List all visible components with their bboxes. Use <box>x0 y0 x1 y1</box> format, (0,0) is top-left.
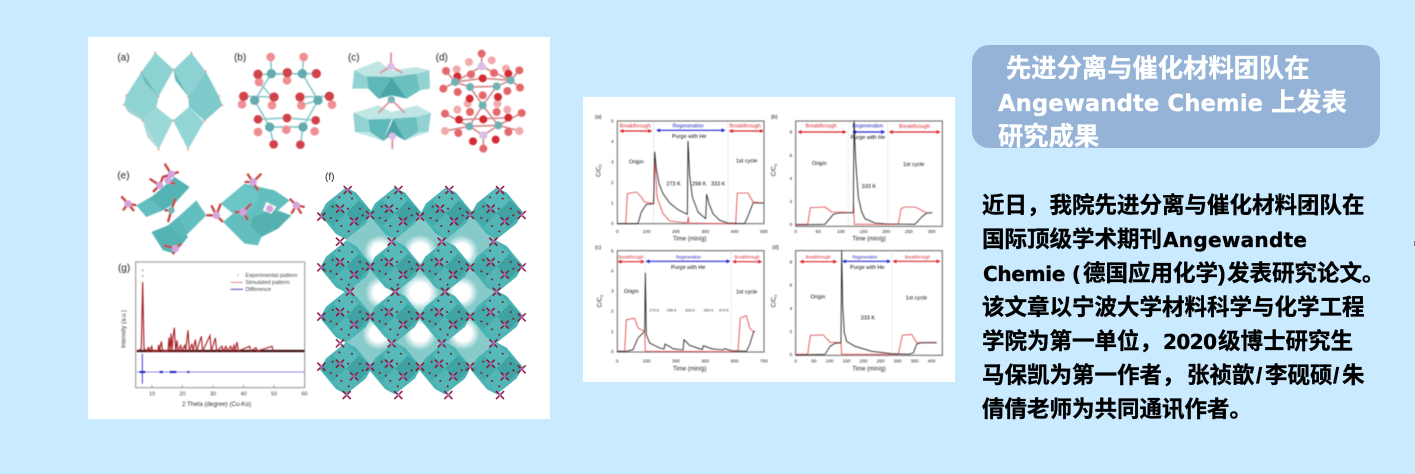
text block: news summary: 发表研究论文。 <box>1227 261 1385 286</box>
chart: breakthrough (a): 3 <box>611 160 614 165</box>
chart: breakthrough (c): 150 <box>643 359 651 364</box>
legend: Experimental pattern <box>245 273 298 279</box>
text block: news summary: 2020 <box>1163 330 1217 354</box>
chart: framework structure (f) <box>317 186 526 399</box>
label: (d): (d) <box>436 52 448 63</box>
structure panels (c) (d) <box>348 50 526 153</box>
chart: XRD pattern (g): 20 <box>179 392 185 398</box>
text block: news summary: / <box>1256 363 1263 388</box>
text block: news summary: 国际顶级学术期刊 <box>982 227 1162 252</box>
chart: breakthrough (d): Regeneration <box>852 254 878 259</box>
chart: breakthrough (c): 2 <box>611 309 614 314</box>
text block: news summary: / <box>1333 363 1340 388</box>
chart: breakthrough (c): 0 <box>611 349 614 354</box>
chart: breakthrough (b): Regeneration <box>852 124 883 130</box>
structure panels (a) (b) (e) <box>117 52 336 254</box>
chart: breakthrough (a): 300 <box>701 229 710 234</box>
chart: breakthrough (a): Origin <box>629 160 644 166</box>
label: (f): (f) <box>325 172 334 183</box>
chart: breakthrough (b): 250 <box>905 229 913 234</box>
chart: breakthrough (b): 150 <box>860 229 868 234</box>
icon: polyhedra sandwich (c) <box>352 53 431 149</box>
chart: breakthrough (b): C/C <box>772 166 778 176</box>
chart: breakthrough (a): Breakthrough <box>620 123 651 129</box>
title banner: 研究成果 <box>998 123 1099 151</box>
chart: breakthrough (c): 450 <box>701 359 710 364</box>
chart: breakthrough (b): 0 <box>790 222 793 227</box>
chart: breakthrough (a): 4 <box>611 139 614 144</box>
legend <box>231 273 298 293</box>
chart: breakthrough (c): 0 <box>616 359 619 364</box>
text block: news summary: ) <box>1218 261 1226 286</box>
chart: breakthrough (d): 8 <box>790 260 793 265</box>
chart: breakthrough (a): 298 K <box>692 181 707 187</box>
chart: breakthrough (b): 8 <box>790 130 793 135</box>
chart: XRD pattern (g): 10 <box>149 392 155 398</box>
chart: breakthrough (d): 0 <box>794 359 797 364</box>
icon: polyhedra ring (a) <box>123 52 223 150</box>
chart: breakthrough (c): Breakthrough <box>735 254 760 259</box>
chart: breakthrough (c): 300 <box>672 359 680 364</box>
text block: news summary: 朱 <box>1342 363 1365 388</box>
chart: breakthrough (a): Time (min/g) <box>673 237 706 243</box>
label: (b): (b) <box>234 52 246 63</box>
chart: breakthrough (a): 0 <box>611 221 614 226</box>
chart: breakthrough (d): 350 <box>911 359 919 364</box>
label: (c): (c) <box>348 52 360 63</box>
chart: breakthrough (d): 0 <box>773 294 778 297</box>
chart: breakthrough (c): 333 K <box>685 308 695 312</box>
title banner: 上发表 <box>1271 89 1347 117</box>
chart: breakthrough (b) <box>771 115 942 243</box>
chart: breakthrough (c) <box>595 245 768 373</box>
chart: breakthrough (b): 200 <box>882 229 891 234</box>
text block: news summary: 级博士研究生 <box>1218 329 1353 354</box>
title banner <box>972 45 1380 151</box>
label: (e): (e) <box>117 170 130 181</box>
chart: breakthrough (d): 250 <box>877 359 885 364</box>
chart: XRD pattern (g): Intensity (a.u.) <box>121 310 127 348</box>
chart: breakthrough (d): Breakthrough <box>806 254 831 259</box>
chart: XRD pattern (g): 50 <box>271 392 277 398</box>
chart: breakthrough (d): Purge with He <box>850 265 884 271</box>
text block: news summary: 张祯歆 <box>1187 363 1255 388</box>
icon: ball and stick (b) <box>238 53 336 149</box>
chart: XRD pattern (g): 60 <box>301 392 307 398</box>
chart: XRD pattern (g): 40 <box>241 392 247 398</box>
panel: crystal structure figure <box>88 37 550 419</box>
chart: breakthrough (d): C/C <box>772 297 778 307</box>
icon: polyhedra chains (e) <box>121 164 305 254</box>
chart: breakthrough (a): 0 <box>616 229 619 234</box>
chart: breakthrough (d): 50 <box>811 359 817 364</box>
chart: XRD pattern (g): 2 Theta (degree) (Cu-Kα) <box>182 401 251 408</box>
chart: breakthrough (c): Origin <box>624 289 639 295</box>
chart: breakthrough (d): 1st cycle <box>906 296 927 302</box>
chart: breakthrough (b): Purge with He <box>851 135 885 141</box>
chart: breakthrough (b): 333 K <box>862 184 876 190</box>
title banner: Angewandte Chemie <box>998 91 1263 117</box>
chart: breakthrough (b): 50 <box>816 229 821 234</box>
chart: breakthrough (c): 373 K <box>719 308 729 312</box>
chart: breakthrough (b): 0 <box>773 163 778 166</box>
text block: news summary: 德国应用化学 <box>1083 260 1218 286</box>
legend: Simulated pattern <box>245 280 290 286</box>
chart: breakthrough (c): 0 <box>599 294 604 297</box>
chart: breakthrough (b): 4 <box>790 176 793 181</box>
chart: breakthrough (d): 100 <box>826 359 834 364</box>
chart: breakthrough (a): 333 K <box>711 181 726 187</box>
chart: breakthrough (c): 600 <box>731 359 739 364</box>
chart: XRD pattern (g): 30 <box>210 392 216 398</box>
text block: news summary: 倩倩老师为共同通讯作者。 <box>982 397 1252 422</box>
chart: breakthrough (d): 333 K <box>861 315 875 321</box>
chart: breakthrough (a): 400 <box>731 229 739 234</box>
chart: breakthrough (c): Purge with He <box>671 265 705 271</box>
chart: breakthrough (d): Origin <box>811 294 825 300</box>
chart: breakthrough (c): C/C <box>598 297 604 307</box>
text block: news summary: Chemie ( <box>983 262 1081 286</box>
chart: breakthrough (c): 3 <box>611 289 614 294</box>
legend: Difference <box>245 287 271 293</box>
chart: breakthrough (c): 298 K <box>667 308 677 312</box>
chart: breakthrough (d): (d) <box>772 245 779 251</box>
chart: breakthrough (a): Breakthrough <box>730 123 761 129</box>
label: (a): (a) <box>117 52 130 63</box>
chart: breakthrough (a): C/C <box>596 167 602 177</box>
chart: breakthrough (b): 6 <box>790 153 793 158</box>
chart: breakthrough (a): 2 <box>611 180 614 185</box>
chart: breakthrough (a): (a) <box>595 115 602 121</box>
chart: breakthrough (d): 400 <box>928 359 936 364</box>
chart: breakthrough (b): Breakthrough <box>806 124 837 130</box>
chart: breakthrough (b): 300 <box>928 229 936 234</box>
chart: breakthrough (d): 150 <box>843 359 851 364</box>
chart: breakthrough (b): 1st cycle <box>903 162 924 168</box>
text block: news summary: 马保凯为第一作者， <box>982 363 1185 388</box>
text block: news summary: 该文章以宁波大学材料科学与化学工程 <box>982 294 1365 320</box>
text block: news summary <box>982 192 1385 422</box>
chart: breakthrough (a): Regeneration <box>673 123 704 129</box>
chart: breakthrough (d): 0 <box>790 352 793 357</box>
text block: news summary: 学院为第一单位， <box>982 328 1162 354</box>
chart: breakthrough (c): Breakthrough <box>618 254 644 259</box>
chart: breakthrough (c): 4 <box>611 269 614 274</box>
chart: breakthrough (b): Time (min/g) <box>852 237 886 243</box>
chart: breakthrough (a): 0 <box>598 164 603 167</box>
chart: breakthrough (c): 353 K <box>704 308 714 312</box>
chart: breakthrough (c): 273 K <box>649 308 660 312</box>
chart: breakthrough (d): 6 <box>790 283 793 288</box>
chart: breakthrough (c): Time (min/g) <box>673 367 706 373</box>
chart: breakthrough (c): Regeneration <box>676 254 702 259</box>
chart: breakthrough (b): 2 <box>790 199 793 204</box>
chart: breakthrough (d): 200 <box>860 359 868 364</box>
text block: news summary: Angewandte <box>1163 228 1307 252</box>
chart: breakthrough (c): 5 <box>611 248 614 253</box>
edge mark <box>1414 241 1415 246</box>
chart: breakthrough (d): 2 <box>790 329 793 334</box>
chart: breakthrough (a): 1st cycle <box>736 159 757 165</box>
chart: breakthrough (b): 0 <box>794 229 797 234</box>
chart: breakthrough (b): Origin <box>812 161 827 167</box>
chart: breakthrough (a) <box>595 115 768 243</box>
chart: breakthrough (d): 300 <box>894 359 902 364</box>
chart: breakthrough (a): 100 <box>643 229 651 234</box>
chart: breakthrough (a): 500 <box>760 229 768 234</box>
text block: news summary: 近日，我院先进分离与催化材料团队在 <box>982 192 1365 218</box>
chart: breakthrough (c): (c) <box>595 245 601 251</box>
chart: XRD pattern (g): (g) <box>118 263 130 274</box>
chart: breakthrough (d) <box>772 245 942 373</box>
chart: breakthrough (b): Breakthrough <box>899 124 930 130</box>
chart: breakthrough (a): 1 <box>611 201 614 206</box>
title banner: 先进分离与催化材料团队在 <box>1006 55 1310 83</box>
chart: breakthrough (d): Time (min/g) <box>852 367 886 373</box>
chart: breakthrough (a): 273 K <box>666 181 681 187</box>
icon: ball and stick (d) <box>439 50 526 153</box>
chart: breakthrough (b): 100 <box>837 229 845 234</box>
chart: XRD pattern (g) <box>118 262 307 408</box>
text block: news summary: 李砚硕 <box>1265 363 1333 388</box>
panel: breakthrough curves figure <box>583 97 955 382</box>
chart: breakthrough (c): 750 <box>760 359 768 364</box>
chart: breakthrough (d): 4 <box>790 306 793 311</box>
chart: breakthrough (c): 1st cycle <box>736 289 757 295</box>
chart: breakthrough (a): Purge with He <box>672 134 706 140</box>
chart: breakthrough (c): 1 <box>611 329 614 334</box>
chart: breakthrough (a): 200 <box>672 229 680 234</box>
chart: breakthrough (d): Breakthrough <box>905 254 931 259</box>
chart: breakthrough (b): (b) <box>771 115 778 121</box>
chart: breakthrough (a): 5 <box>611 119 614 124</box>
